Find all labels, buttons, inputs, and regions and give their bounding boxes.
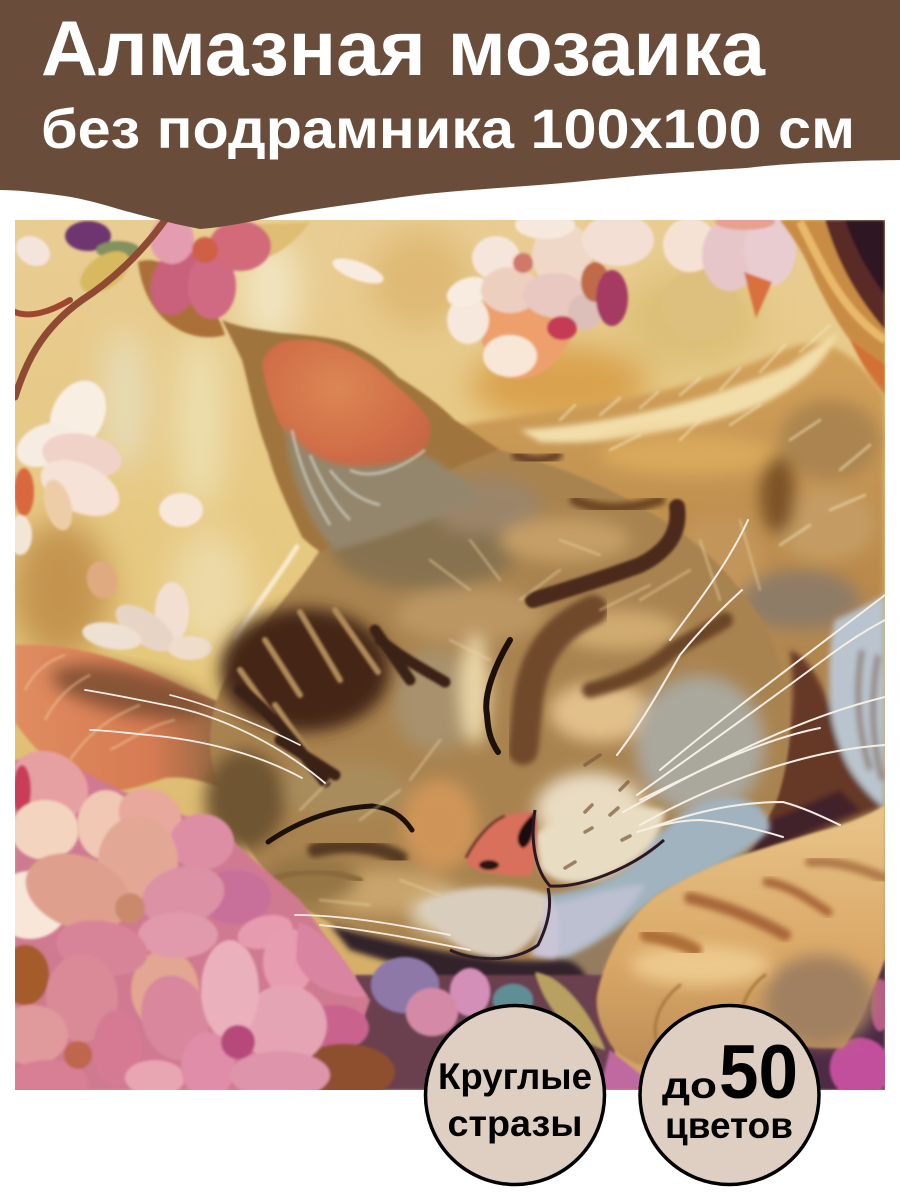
- left ear shadow and hairs: [25, 654, 213, 760]
- back highlight and body tones: [520, 332, 880, 630]
- pink flowers: bottom left cluster base: [15, 760, 370, 1090]
- mouth line: [450, 810, 664, 959]
- paw stripes and toes: [630, 862, 884, 1055]
- cherry blossom: top centre flower: [443, 211, 654, 379]
- left temple dark patch: [220, 608, 390, 732]
- badge: up to 50 colours: цветов: [665, 1105, 793, 1146]
- badge: up to 50 colours: 50: [719, 1030, 798, 1115]
- nose: [466, 812, 537, 876]
- painting background: [15, 220, 885, 1090]
- tree trunk: [780, 220, 885, 395]
- white flower left: [15, 379, 122, 556]
- under-eye stripe: [315, 846, 400, 858]
- neck fur rim: [235, 545, 298, 640]
- head tonal patches: [205, 477, 765, 937]
- closed eyes: [268, 640, 510, 842]
- tan gaps between stripes: [240, 610, 378, 755]
- fur stripes: [220, 455, 725, 880]
- muzzle and blue-white chin fur: [420, 798, 770, 962]
- temple stripe: [590, 620, 725, 690]
- bottom background plants: [355, 957, 890, 1098]
- main forehead stripe: [533, 507, 678, 600]
- bottom left pink flower: [0, 954, 185, 1104]
- ear-base blot: [517, 455, 557, 460]
- badge: round rhinestones: стразы: [448, 1103, 582, 1144]
- fur texture strokes: [300, 325, 870, 905]
- ear inner grey fur: [285, 425, 480, 550]
- badge: round rhinestones: [426, 1006, 604, 1184]
- badge: round rhinestones: Круглые: [438, 1056, 592, 1097]
- bud and leaf at top left: [65, 221, 140, 301]
- badge: up to 50 colours: [640, 1006, 819, 1184]
- subtitle: без подрамника 100х100 см: [41, 97, 855, 160]
- title: Алмазная мозаика: [41, 4, 766, 92]
- flower cluster left pale flowers: [0, 737, 101, 1005]
- loose petals: [15, 234, 385, 600]
- dark shadow under chin: [328, 922, 589, 977]
- background light streaks: [10, 230, 760, 660]
- ear inner salmon: [262, 340, 430, 477]
- muzzle spots: [565, 755, 630, 868]
- badge: up to 50 colours: до: [662, 1065, 717, 1106]
- white flower lower left: [80, 582, 212, 661]
- brow stripe near the eye: [523, 610, 593, 750]
- bottom centre pink flower: [132, 940, 395, 1100]
- whiskers: [85, 520, 885, 950]
- cherry blossom: top pink flower: [138, 216, 310, 337]
- left ear: [15, 644, 218, 791]
- paw: [597, 805, 885, 1065]
- pink flower right of cluster: [234, 909, 369, 1051]
- main pink flower: [15, 780, 271, 1030]
- branches: [15, 220, 165, 397]
- dark stripes: [240, 630, 445, 782]
- upper forehead stripe: [575, 500, 660, 508]
- cherry blossom: top right flower: [662, 220, 798, 318]
- header banner: [0, 0, 900, 229]
- ear body: [222, 320, 500, 553]
- illustration: sleeping cat painting: [0, 211, 890, 1104]
- right-side chest and white fur: [745, 595, 885, 860]
- cat head: [210, 450, 790, 965]
- cat body and back fur: [461, 341, 885, 984]
